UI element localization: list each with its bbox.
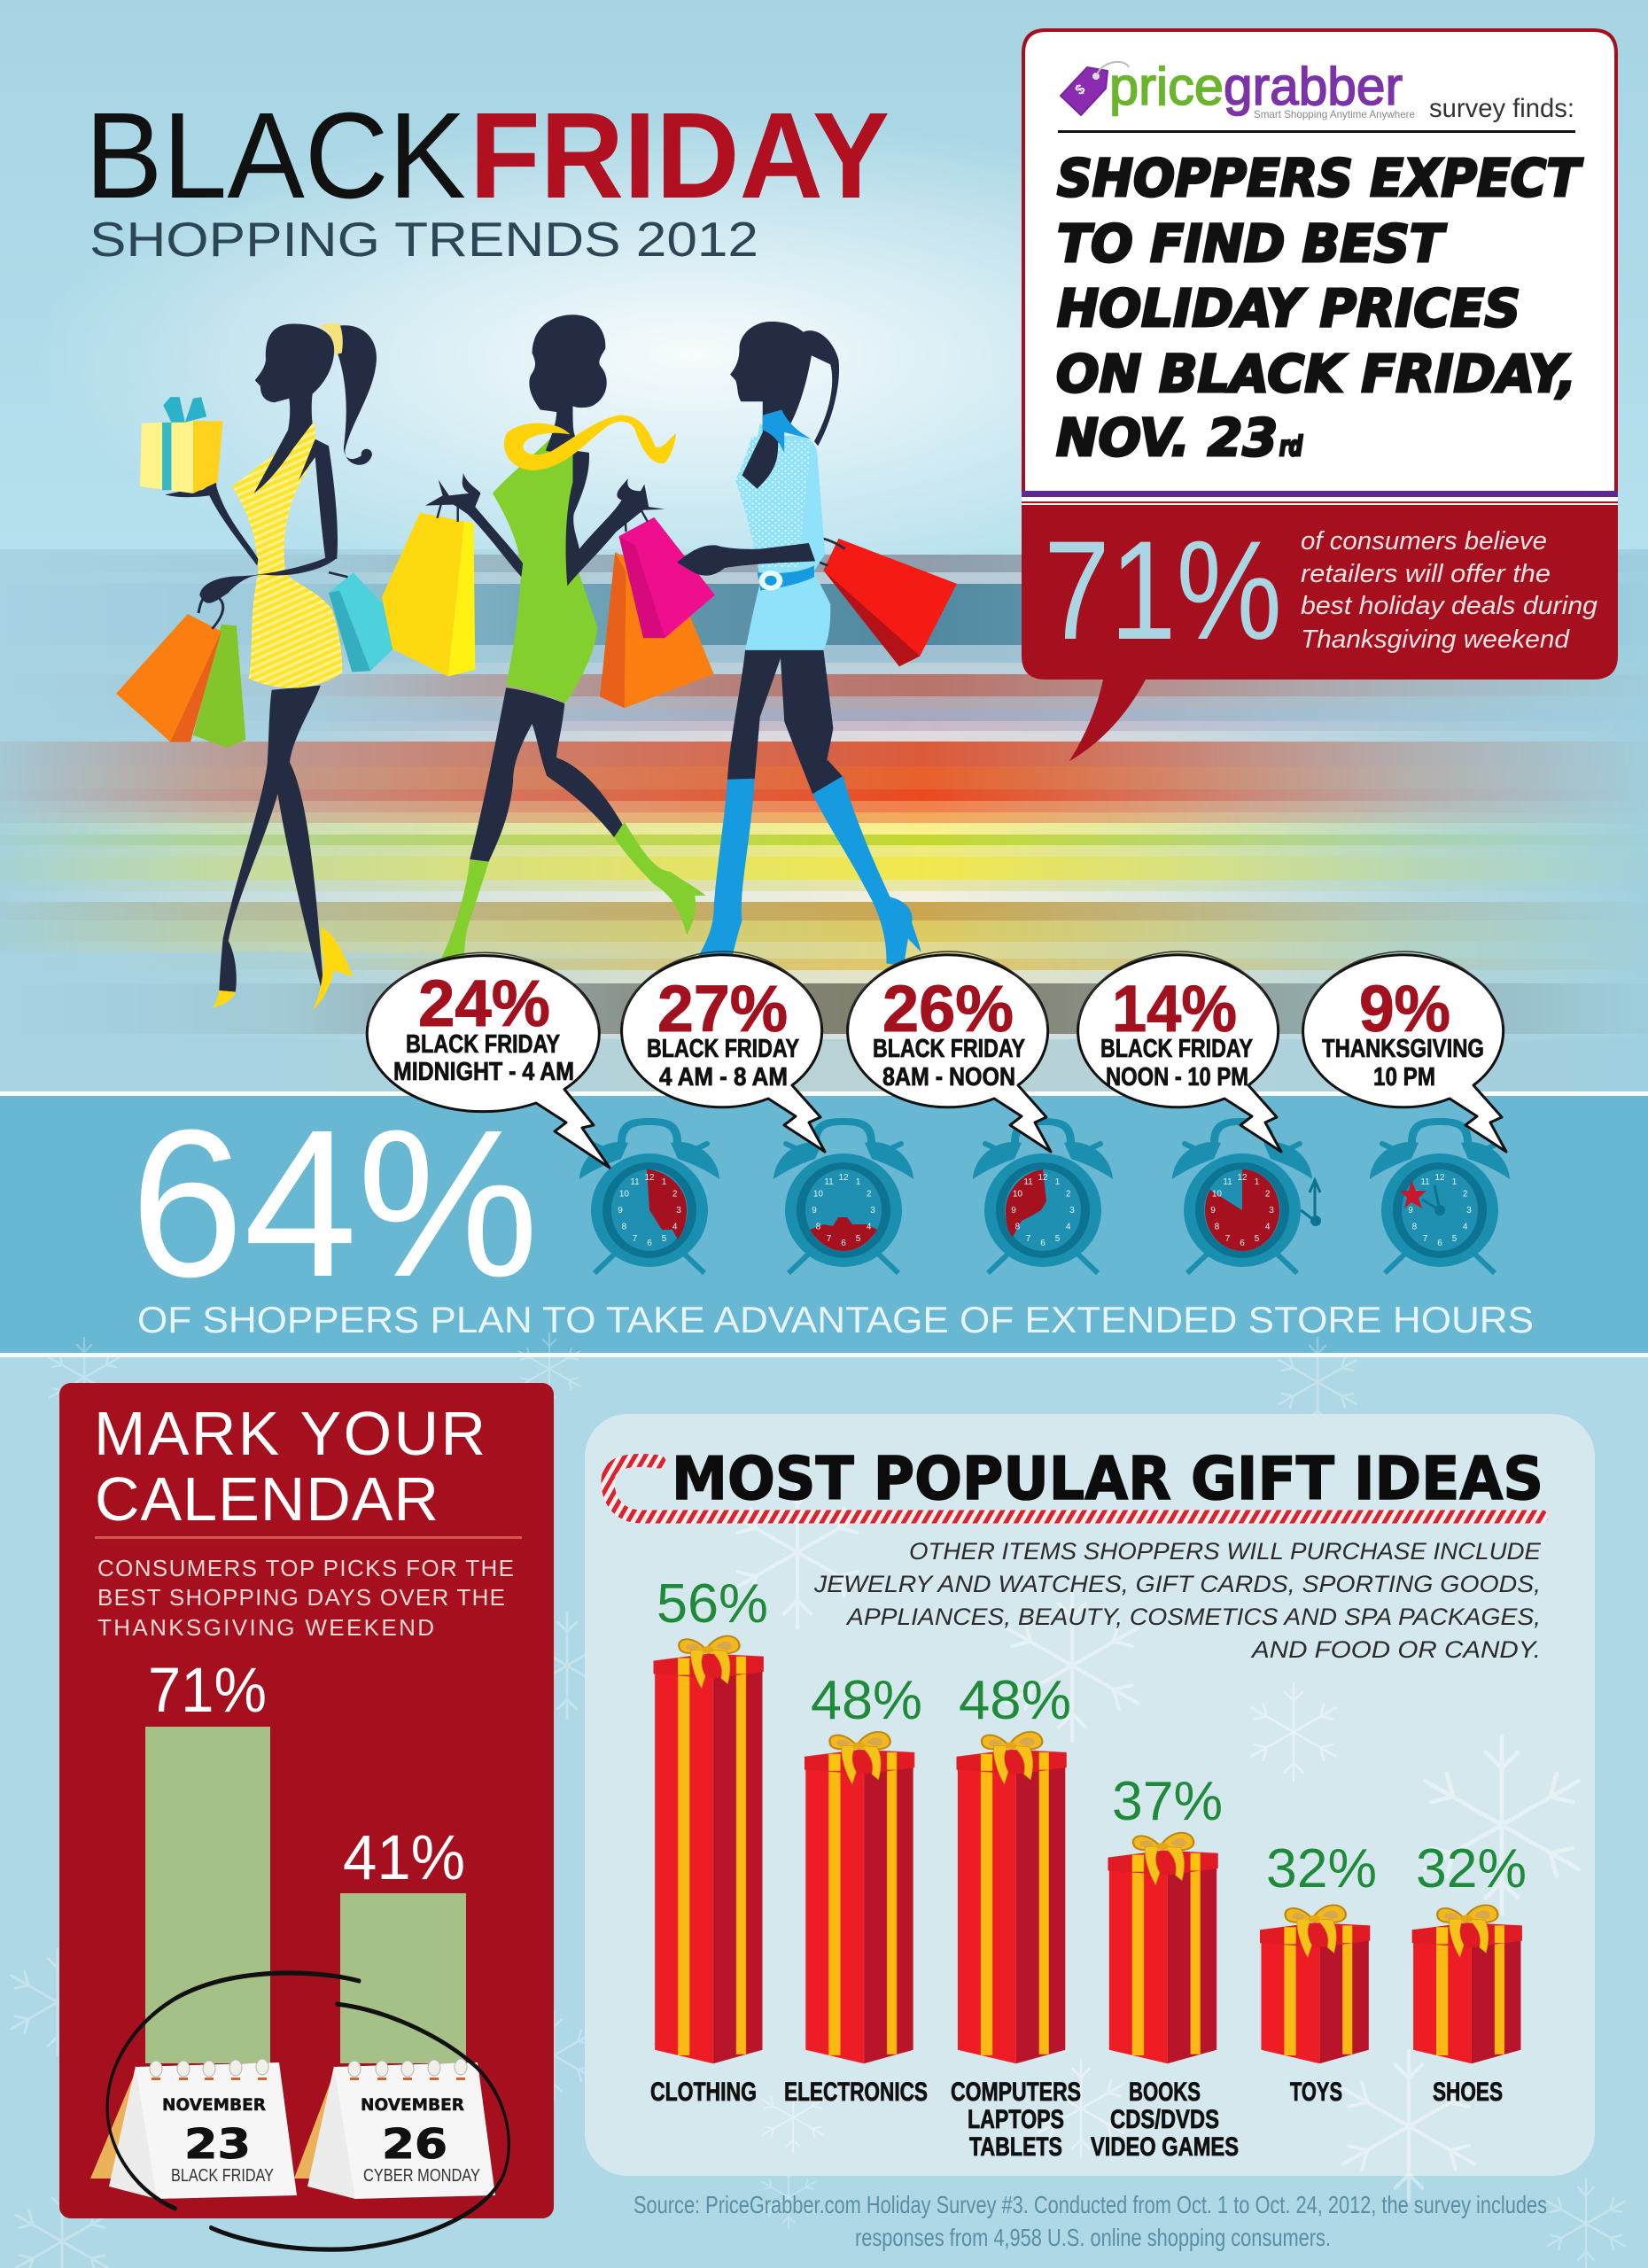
gifts paragraph: APPLIANCES, BEAUTY, COSMETICS AND SPA PACKAGES, <box>845 1604 1541 1630</box>
bar chart: shopping days: 71% <box>148 1656 267 1726</box>
bubble 24% <box>367 952 610 1168</box>
bubble 9%: 10 PM <box>1373 1063 1435 1091</box>
logo: pricegrabber <box>1061 57 1415 120</box>
71% stat: 71% <box>1044 511 1282 669</box>
shopper 1 <box>116 323 410 1010</box>
panel: most popular gift ideas <box>585 1414 1595 2202</box>
gift percentages: 32% <box>1266 1838 1377 1899</box>
bubble 14%: NOON - 10 PM <box>1106 1063 1248 1091</box>
hand-drawn circle <box>107 1973 509 2249</box>
gift bars <box>654 1636 1522 2063</box>
logo: pricegrabber: $ <box>1073 82 1088 98</box>
gift labels: SHOES <box>1433 2078 1503 2107</box>
gift labels: TABLETS <box>969 2132 1062 2162</box>
bubble 27%: BLACK FRIDAY <box>647 1035 799 1063</box>
gifts paragraph: AND FOOD OR CANDY. <box>1250 1636 1541 1663</box>
source note: responses from 4,958 U.S. online shopping consumers. <box>855 2224 1331 2251</box>
bar chart: shopping days <box>145 1656 466 2063</box>
gift labels: TOYS <box>1290 2078 1342 2107</box>
title: SHOPPING TRENDS 2012 <box>89 212 758 267</box>
shopper 2 <box>382 315 715 959</box>
71% caption: best holiday deals during <box>1301 592 1597 620</box>
headline: HOLIDAY PRICES <box>1057 278 1520 338</box>
calendar: november 26: 26 <box>382 2120 447 2168</box>
clock 1 <box>579 1118 719 1273</box>
logo: pricegrabber: grabber <box>1224 57 1403 116</box>
headline: NOV. 23 <box>1056 408 1278 468</box>
calendar: november 26 <box>294 2059 495 2199</box>
gift percentages: 48% <box>811 1670 922 1731</box>
headline: rd <box>1279 431 1302 462</box>
gift labels: COMPUTERS <box>951 2078 1081 2107</box>
headline <box>1056 148 1583 468</box>
gift labels: BOOKS <box>1129 2078 1201 2107</box>
bubble 14%: BLACK FRIDAY <box>1100 1035 1253 1063</box>
gift percentages: 37% <box>1112 1771 1223 1832</box>
gift percentages: 56% <box>657 1573 768 1635</box>
title: BLACK <box>85 88 466 224</box>
gift labels: LAPTOPS <box>968 2105 1064 2134</box>
bubble 27% <box>622 951 825 1152</box>
bubble 14%: 14% <box>1112 972 1237 1045</box>
gift clothing <box>654 1636 764 2063</box>
gift labels: ELECTRONICS <box>784 2078 928 2107</box>
bubble 24%: 24% <box>418 967 550 1040</box>
gift labels: CLOTHING <box>650 2078 757 2107</box>
logo: pricegrabber: price <box>1109 57 1224 116</box>
headline: TO FIND BEST <box>1057 214 1447 274</box>
calendar subheading: BEST SHOPPING DAYS OVER THE <box>97 1584 505 1611</box>
speech callout panel <box>1022 28 1618 761</box>
calendar: november 26: CYBER MONDAY <box>363 2166 480 2186</box>
gift percentages: 32% <box>1416 1838 1527 1899</box>
bubble 27%: 4 AM - 8 AM <box>659 1063 788 1091</box>
bubble 27%: 27% <box>657 972 788 1045</box>
panel: mark your calendar <box>59 1383 554 2249</box>
clock 4 <box>1172 1118 1321 1273</box>
calendar subheading: THANKSGIVING WEEKEND <box>97 1614 434 1641</box>
survey finds: survey finds: <box>1429 94 1574 123</box>
calendar: november 23: BLACK FRIDAY <box>171 2166 274 2186</box>
calendar: november 26: NOVEMBER <box>361 2095 464 2115</box>
71% caption <box>1301 527 1597 654</box>
lower background with snowflakes <box>0 1333 1648 2268</box>
clock 3 <box>973 1118 1113 1273</box>
calendar subheading: CONSUMERS TOP PICKS FOR THE <box>97 1555 514 1581</box>
bubble 26%: 26% <box>882 972 1014 1045</box>
gift labels: CDS/DVDS <box>1110 2105 1219 2134</box>
gifts paragraph <box>813 1538 1542 1663</box>
sky background <box>0 0 1648 1091</box>
speech bubbles: hour shares <box>367 951 1506 1168</box>
gift electronics <box>805 1732 914 2063</box>
gift percentages <box>657 1573 1527 1899</box>
title <box>85 88 890 267</box>
clock 5 <box>1370 1118 1510 1273</box>
calendar heading: MARK YOUR <box>94 1399 486 1468</box>
bubble 24%: BLACK FRIDAY <box>406 1030 560 1059</box>
gift computers <box>956 1732 1067 2063</box>
bubble 9%: THANKSGIVING <box>1322 1035 1484 1063</box>
calendar: november 23: 23 <box>184 2120 251 2168</box>
64% stat: 64% <box>130 1086 539 1321</box>
source note <box>634 2191 1547 2251</box>
bubble 26%: 8AM - NOON <box>882 1063 1015 1091</box>
gifts paragraph: JEWELRY AND WATCHES, GIFT CARDS, SPORTING GOODS, <box>813 1571 1541 1597</box>
headline: SHOPPERS EXPECT <box>1057 148 1583 208</box>
title: FRIDAY <box>470 88 890 224</box>
bubble 26%: BLACK FRIDAY <box>873 1035 1025 1063</box>
shoppers silhouettes <box>116 315 957 1010</box>
gifts heading: MOST POPULAR GIFT IDEAS <box>672 1444 1543 1513</box>
gift toys <box>1260 1905 1370 2063</box>
calendar heading <box>94 1399 486 1534</box>
bubble 14% <box>1078 951 1281 1152</box>
headline: ON BLACK FRIDAY, <box>1056 344 1576 404</box>
bubble 9%: 9% <box>1359 972 1450 1045</box>
71% caption: of consumers believe <box>1301 527 1547 555</box>
bubble 9% <box>1303 951 1506 1152</box>
calendar heading: CALENDAR <box>95 1464 439 1534</box>
gift percentages: 48% <box>959 1670 1071 1731</box>
extended hours caption: OF SHOPPERS PLAN TO TAKE ADVANTAGE OF EXTENDED STORE HOURS <box>137 1299 1534 1340</box>
calendar subheading <box>97 1555 514 1641</box>
logo: pricegrabber: Smart Shopping Anytime Anywhere <box>1254 108 1415 120</box>
candy cane <box>608 1460 1542 1517</box>
bubble 24%: MIDNIGHT - 4 AM <box>393 1058 574 1086</box>
gift labels: VIDEO GAMES <box>1091 2132 1239 2162</box>
clock 2 <box>773 1118 913 1273</box>
gift books <box>1108 1833 1218 2063</box>
extended hours band <box>0 1086 1648 1357</box>
calendar: november 23: NOVEMBER <box>162 2095 266 2115</box>
shopper 3 <box>677 322 957 966</box>
calendar: november 23 <box>90 2059 297 2199</box>
bubble 26% <box>848 951 1051 1152</box>
gift shoes <box>1412 1905 1522 2063</box>
71% caption: retailers will offer the <box>1301 560 1551 588</box>
gifts paragraph: OTHER ITEMS SHOPPERS WILL PURCHASE INCLUDE <box>909 1538 1542 1565</box>
bar chart: shopping days: 41% <box>343 1823 465 1893</box>
gift labels <box>650 2078 1503 2162</box>
71% caption: Thanksgiving weekend <box>1301 625 1570 654</box>
